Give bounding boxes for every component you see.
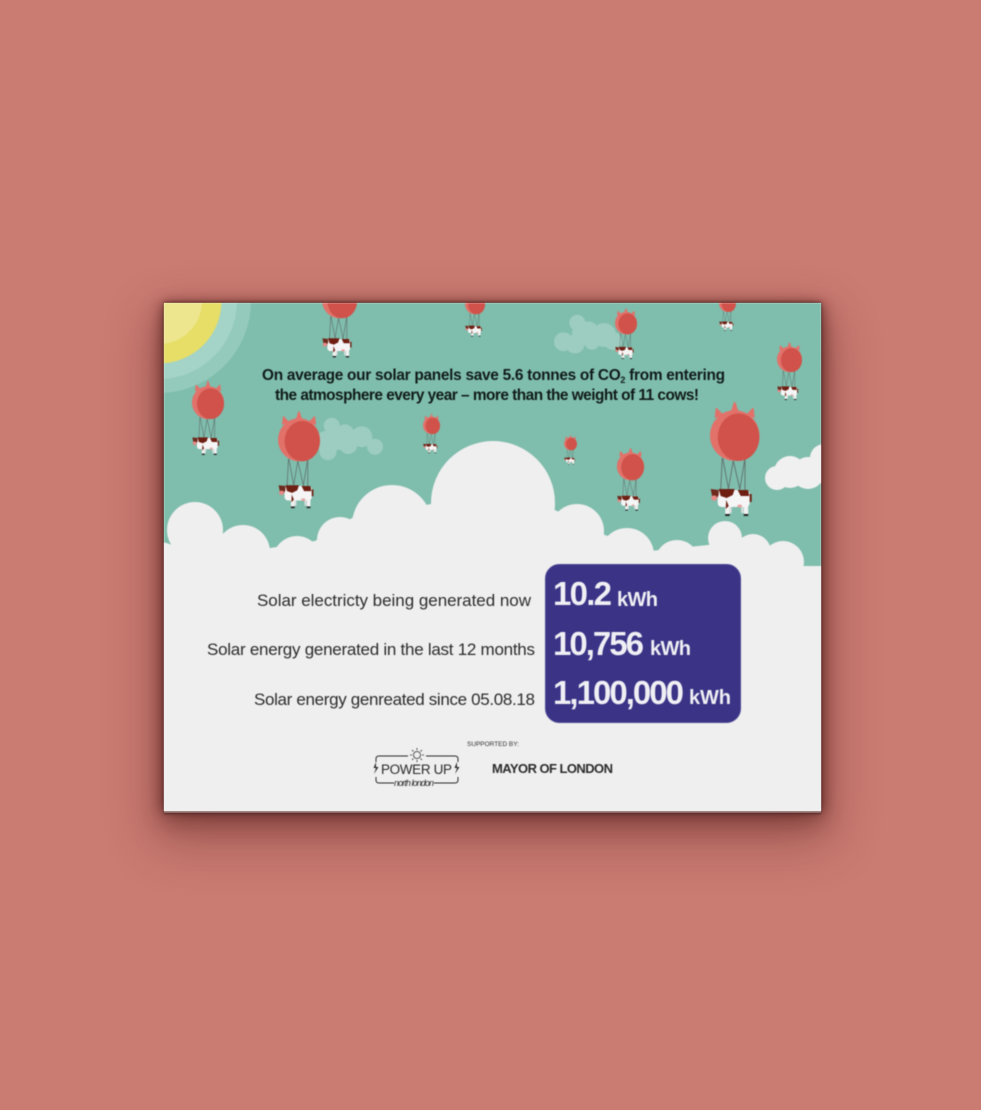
logo: Power Up North London: POWER UP	[381, 762, 452, 777]
heading	[262, 367, 725, 404]
value: 12 months: kWh	[650, 638, 691, 660]
stat labels	[207, 591, 535, 709]
heading: 2	[620, 375, 625, 385]
value: total: kWh	[689, 687, 731, 709]
value: current: kWh	[617, 589, 658, 611]
balloon cow 8	[777, 342, 802, 400]
balloon cow 1	[322, 302, 358, 358]
logo: Power Up North London	[374, 748, 460, 788]
balloon cow 3	[192, 381, 224, 455]
large white cloud bank	[136, 441, 821, 811]
logo: Mayor of London: MAYOR OF LONDON	[492, 761, 613, 776]
white cloud right edge	[764, 444, 822, 490]
supported by: SUPPORTED BY:	[467, 741, 519, 748]
balloon cow 7	[718, 302, 736, 332]
balloon cow 6	[615, 308, 637, 359]
value: total	[554, 680, 730, 710]
heading: On average our solar panels save 5.6 tonnes of CO	[262, 367, 621, 384]
balloon cow 5	[423, 414, 440, 453]
value: current: 10.2	[553, 575, 612, 612]
faint cloud left	[316, 418, 383, 460]
value: current	[554, 581, 658, 607]
heading: the atmosphere every year – more than the weight of 11 cows!	[275, 387, 699, 404]
balloon cow 9	[710, 402, 759, 516]
balloon cow 2	[464, 302, 486, 338]
panel: stats	[546, 564, 740, 722]
stat labels: Solar energy genreated since 05.08.18	[254, 690, 535, 709]
balloon cow 10	[564, 435, 577, 465]
stat labels: Solar electricty being generated now	[257, 591, 532, 610]
value: 12 months: 10,756	[553, 625, 644, 662]
value: 12 months	[554, 631, 690, 662]
panel: sky background	[164, 303, 821, 583]
stat labels: Solar energy generated in the last 12 months	[207, 640, 535, 659]
value: total: 1,100,000	[553, 674, 684, 711]
balloon cow 11	[617, 448, 644, 511]
heading: from entering	[625, 367, 725, 384]
logo: Power Up North London: north london	[394, 778, 434, 788]
faint cloud top right	[554, 315, 622, 354]
icon: sun	[163, 302, 251, 393]
balloon cow 4	[278, 411, 320, 508]
